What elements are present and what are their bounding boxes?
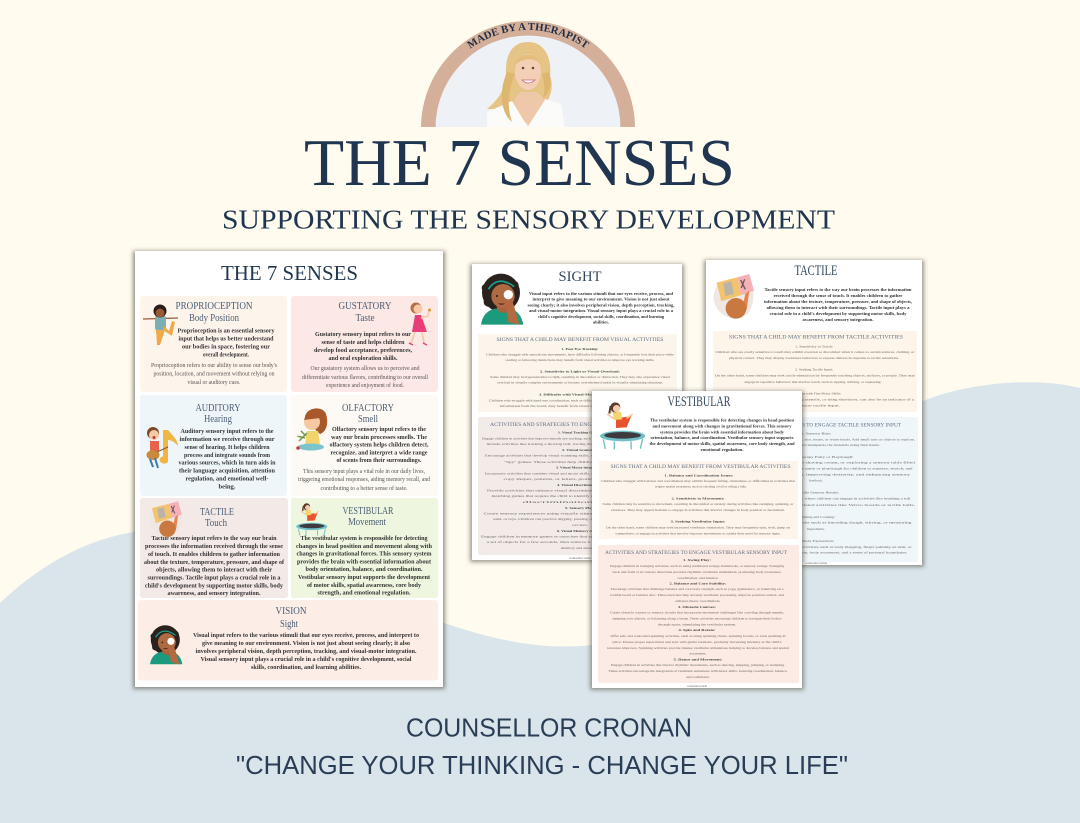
tactile intro: Tactile sensory input refers to the way our brain processes the information <box>764 287 912 292</box>
panel: tactile: of touch. It enables children to gather information <box>148 551 280 558</box>
panel: proprioception: visual or auditory cues. <box>188 380 241 386</box>
panel: proprioception <box>140 296 287 392</box>
panel: olfactory: This sensory input plays a vital role in our daily lives, <box>303 469 425 475</box>
panel: visual activities: "Spy" games. These activities help children improve their ability to scan. <box>504 460 656 464</box>
panel: vestibular activities: place. Ensure proper supervision and start with gentle rotations, gradually increasing intensity as the child's <box>612 640 782 645</box>
panel: gustatory: Our gustatory system allows us to perceive and <box>310 366 420 372</box>
panel: gustatory: and oral exploration skills. <box>328 355 398 362</box>
panel: gustatory: Gustatory sensory input refers to our <box>315 331 411 338</box>
panel: vestibular activities: Encourage activities that challenge balance and core body strength, such as yoga, gymnastics, or balancing on a <box>610 587 784 592</box>
icon: girl covering one eye <box>150 625 182 664</box>
subtitle: SUPPORTING THE SENSORY DEVELOPMENT <box>222 204 836 234</box>
sight intro: abilities. <box>593 320 609 324</box>
vestibular intro: emotional regulation. <box>700 447 744 452</box>
tactile intro: crucial role in a child's development by supporting motor skills, body <box>770 311 907 316</box>
panel: tactile signs: Difficulty with tasks such as buttoning, using utensils, or tying shoelaces, can also be an indicator of a <box>716 398 915 402</box>
vestibular intro: and movement along with changes in gravitational forces. This sensory <box>652 424 792 428</box>
panel: proprioception: Proprioception is an essential sensory <box>178 328 275 334</box>
panel: vestibular activities <box>598 545 799 683</box>
panel: tactile signs: child needing more tactile input. <box>770 404 840 408</box>
panel: visual activities: ACTIVITIES AND STRATEGIES TO ENGAGE VISUAL SENSORY INPUT <box>490 423 670 428</box>
panel: vision: Visual sensory input plays a crucial role in a child's cognitive development, social <box>200 656 412 663</box>
vestibular intro: system provides the brain with essential information about body <box>660 430 785 434</box>
panel: vestibular: provides the brain with essential information about <box>297 558 432 566</box>
panel: gustatory: differentiate various flavors, contributing to our overall <box>302 374 428 381</box>
panel: tactile: objects, allowing them to interact with their <box>156 566 272 574</box>
panel: vestibular activities: tolerance improves. Spinning activities provide intense vestibular stimulation, helping to develop balance and spatial <box>607 646 789 651</box>
panel: vestibular activities: 5. Dance and Movement: <box>674 658 722 662</box>
panel: olfactory: OLFACTORY <box>342 403 394 414</box>
panel: tactile activities: encouraging children to feel and manipulate the materials using their hands. <box>752 443 880 447</box>
arch caption: MADE BY A THERAPIST <box>466 22 590 49</box>
panel: vestibular activities: wobble board or balance disc. These exercises help develop vestibular processing, improve postural control, and <box>610 593 784 598</box>
panel: vestibular activities: Create obstacle courses or sensory circuits that incorporate movement challenges like crawling through tunnels, <box>610 610 784 616</box>
panel: visual signs: information from the board, may benefit from visual activities that improve these motor skills. <box>500 404 660 409</box>
panel: vestibular signs: trampolines, or engage in activities that involve vigorous movements to satisfy their need for sensory input. <box>616 532 781 536</box>
panel: visual activities: 4. Visual Discrimination: <box>557 483 603 487</box>
tactile intro: allowing them to interact with their surroundings. Tactile input plays a <box>766 305 910 310</box>
panel: visual activities: sand, or toys. Children can practice digging, pouring, and searching for objects while visual play <box>493 517 668 522</box>
panel: vision <box>138 600 438 680</box>
panel: vestibular: changes in head position and movement along with <box>296 543 432 550</box>
footer credit: counsellorcronan <box>805 561 827 565</box>
panel: tactile activities: with different textures. Offer tactile therapy putty or playdough for children to squeeze, stretch, and <box>720 466 913 472</box>
panel: tactile activities: Encourage tactile body exploration through activities such as body mapping, finger painting on skin, or <box>720 545 913 550</box>
panel: visual signs: SIGNS THAT A CHILD MAY BENEFIT FROM VISUAL ACTIVITIES <box>496 338 664 343</box>
panel: tactile activities: 3. Tactile Sensory Breaks: <box>793 490 839 494</box>
panel: visual activities: 5. Sensory Play: <box>565 506 595 510</box>
panel: vision: Visual input refers to the various stimuli that our eyes receive, process, and interpret to <box>193 632 419 639</box>
panel: visual activities: 3. Visual Motor Integration: <box>556 466 604 470</box>
panel: vestibular signs: 1. Balance and Coordination Issues: <box>664 474 734 478</box>
panel: visual activities: 1. Visual Tracking Games: <box>558 430 602 434</box>
panel: tactile signs: On the other hand, some children may seek tactile stimulation by frequently touching objects, surfaces, or people. They may <box>715 374 916 378</box>
panel: proprioception: input that helps us better understand <box>178 336 274 342</box>
panel: tactile: awareness, and sensory integration. <box>168 590 261 597</box>
panel: auditory: their language acquisition, attention <box>179 468 275 474</box>
panel: olfactory: Olfactory sensory input refers to the <box>332 426 426 433</box>
panel: tactile signs: SIGNS THAT A CHILD MAY BENEFIT FROM TACTILE ACTIVITIES <box>729 336 903 340</box>
panel: tactile activities: brush on their skin or using texture-related activities like Velcro boards or tactile balls. <box>717 503 915 507</box>
panel: vestibular signs: 2. Sensitivity to Movement: <box>672 496 724 500</box>
panel: visual signs: Children who struggle with smooth eye movements, have difficulty following objects, or frequently lose their place while <box>486 352 675 358</box>
poster: tactile <box>704 260 924 567</box>
panel: visual activities: a set of objects for a few seconds, then remove it and ask them to recall what was there. <box>486 540 674 545</box>
therapist portrait arch <box>421 21 635 127</box>
panel: proprioception: PROPRIOCEPTION <box>176 301 252 312</box>
panel: tactile: Tactile sensory input refers to the way our brain <box>152 535 277 542</box>
panel: tactile: Touch <box>205 518 227 529</box>
panel: vestibular signs: require spatial awareness, such as catching a ball or riding a bike. <box>655 484 747 490</box>
icon: child reading a book <box>149 501 182 537</box>
panel: vestibular signs: Some children may be sensitive to movement, resulting in discomfort or anxiety during activities like swinging, spinning, or <box>602 502 795 507</box>
icon: boy with guitar <box>146 427 178 468</box>
panel: vestibular activities: jumping over objects, or balancing along a beam. These activities encourage children to navigate their bodies <box>611 616 782 622</box>
panel: olfactory: olfactory system helps children detect, <box>330 442 429 448</box>
panel: auditory <box>140 395 287 496</box>
panel: visual activities: Encourage activities that develop visual scanning skills, such as word searches or hidden pictures and <box>485 454 676 458</box>
panel: vestibular: changes in gravitational forces. This sensory system <box>296 550 432 558</box>
vestibular intro: The vestibular system is responsible for detecting changes in head position <box>650 418 794 422</box>
panel: vestibular activities: Engage children in swinging activities, such as using traditional swings, hammocks, or sensory swings. Swinging <box>610 564 784 569</box>
panel: tactile signs: physical contact. They may display avoidance behaviors or express distress in response to tactile sensations. <box>729 356 899 360</box>
panel: vestibular activities: coordination, and balance. <box>678 576 719 581</box>
icon: girl with flowers <box>296 408 327 450</box>
panel: auditory: Hearing <box>204 414 232 425</box>
panel: tactile: about the texture, temperature, pressure, and shape of <box>144 559 285 566</box>
tactile intro: information about the texture, temperature, pressure, and shape of objects, <box>764 299 912 304</box>
panel: vestibular signs: 3. Seeking Vestibular Input: <box>670 520 726 524</box>
panel: visual activities: discrimination abilities. <box>522 500 638 504</box>
panel: tactile: surroundings. Tactile input plays a crucial role in a <box>148 574 281 582</box>
panel: vestibular signs: On the other hand, some children may seek increased vestibular stimulation. They may frequently spin, twirl, jump on <box>606 526 790 530</box>
panel: olfactory: Smell <box>358 414 378 425</box>
panel: gustatory: GUSTATORY <box>338 301 392 312</box>
panel: proprioception: position, location, and movement without relying on <box>154 372 274 378</box>
panel: tactile activities: 2. Tactile Therapy Putty or Playdough: <box>778 455 854 459</box>
panel: tactile activities: ingredients. <box>807 527 825 531</box>
panel: olfactory: triggering emotional responses, aiding memory recall, and <box>298 477 430 483</box>
panel: vestibular: body orientation, balance, and coordination. <box>306 566 423 573</box>
panel: gustatory: Taste <box>356 313 375 324</box>
sight intro: and visual-motor integration. Visual sensory input plays a crucial role in a <box>529 308 674 313</box>
tactile intro: awareness, and sensory integration. <box>802 317 874 322</box>
panel: tactile signs: Children who are overly sensitive to touch may exhibit aversion or discomfort when it comes to certain textures, clothing, or <box>716 350 916 355</box>
panel: tactile: child's development by supporting motor skills, body <box>145 582 284 590</box>
panel: vision: Sight <box>280 619 298 630</box>
panel: tactile activities: Incorporate tactile breaks throughout the day, where children can engage in activities like brushing a soft <box>722 496 911 502</box>
panel: olfactory <box>291 395 438 496</box>
poster: vestibular <box>590 391 804 690</box>
panel: visual signs: 1. Poor Eye Tracking: <box>562 347 598 351</box>
tactile title: TACTILE <box>794 263 838 279</box>
panel: tactile activities: ACTIVITIES AND STRATEGIES TO ENGAGE TACTILE SENSORY INPUT <box>731 424 901 428</box>
panel: vision: skills, coordination, and learning abilities. <box>251 664 361 671</box>
panel: vestibular: strength, and emotional regulation. <box>318 590 411 596</box>
panel: vision: VISION <box>276 606 306 617</box>
vestibular intro: the development of motor skills, spatial awareness, core body strength, and <box>650 441 795 446</box>
panel: visual signs <box>478 334 677 412</box>
panel: visual signs: Children who struggle with hand-eye coordination, such as difficulty copying shapes or catching a ball, or copying <box>489 398 671 404</box>
panel: tactile signs: 3. Difficulty with Fine Motor Skills: <box>787 392 841 396</box>
panel: visual activities: 6. Visual Memory Games: <box>557 529 603 533</box>
panel: proprioception: Body Position <box>189 313 239 324</box>
panel: vestibular activities: back and forth or in various directions provides rhythmic vestibular stimulation, promoting body awareness, <box>612 570 782 575</box>
sight intro: seeing clearly; it also involves peripheral vision, depth perception, tracking, <box>528 302 674 308</box>
panel: tactile activities: 5. Body Exploration: <box>798 539 834 543</box>
sight intro: child's cognitive development, social skills, coordination, and learning <box>538 314 665 319</box>
brand name: COUNSELLOR CRONAN <box>406 712 692 742</box>
panel: gustatory: sense of taste and helps children <box>322 339 405 346</box>
panel: visual activities: 2. Visual Scanning: <box>562 448 598 452</box>
panel: vestibular activities: 1. Swing Play: <box>683 558 711 562</box>
panel: vestibular activities: These activities encourage the integration of vestibular sensations with motor skills, fostering coordination, balance, <box>608 669 788 674</box>
panel: vestibular activities: 2. Balance and Core Stability: <box>670 582 726 586</box>
panel: visual activities: occurs. <box>572 523 588 527</box>
panel: vestibular activities: through space, stimulating the vestibular system. <box>658 622 736 628</box>
panel: auditory: AUDITORY <box>196 403 240 414</box>
panel: vestibular <box>291 498 438 598</box>
panel: tactile <box>140 498 288 598</box>
panel: visual activities: Create sensory experiences using visually stimulating materials, such as colored rice, <box>484 512 677 516</box>
panel: vestibular: VESTIBULAR <box>342 506 394 517</box>
panel: visual activities: Engage children in memory games or exercises that promote visual memory. For example, show <box>481 534 680 540</box>
poster: sight <box>470 264 684 562</box>
vestibular title: VESTIBULAR <box>668 394 730 410</box>
panel: vestibular signs: SIGNS THAT A CHILD MAY BENEFIT FROM VESTIBULAR ACTIVITIES <box>610 465 791 470</box>
panel: vestibular activities: and confidence. <box>686 675 710 679</box>
panel: vision: involves peripheral vision, depth perception, tracking, and visual-motor integration. <box>196 648 417 655</box>
panel: tactile: processes the information received through the sense <box>145 543 283 550</box>
sight intro: interpret to give meaning to our environment. Vision is not just about <box>532 296 670 302</box>
panel: visual activities: matching games that require the child to identify similarities and differences to improve <box>492 494 669 498</box>
icon: girl with ice cream <box>409 302 431 345</box>
panel: auditory: information we receive through our <box>180 436 275 443</box>
panel: proprioception: overall development. <box>203 352 249 358</box>
poster: the 7 senses overview <box>133 251 445 689</box>
panel: gustatory <box>291 296 438 392</box>
icon: child reading a book <box>713 274 754 319</box>
panel: tactile signs: 2. Seeking Tactile Input: <box>795 368 833 372</box>
panel: tactile activities: feedback. <box>809 478 823 482</box>
panel: visual signs: overload in visually complex environments or become overwhelmed easily in visually stimulating situations. <box>497 380 663 384</box>
panel: vestibular activities: awareness. <box>690 652 707 656</box>
tagline: "CHANGE YOUR THINKING - CHANGE YOUR LIFE" <box>236 750 848 780</box>
panel: tactile activities: Create sensory bins filled with materials like sand, rice, beans, or water beads. Add small toys or objects to explore, <box>717 438 915 442</box>
blue wave background <box>0 382 1080 823</box>
panel: tactile activities: mold, strengthening hand muscles, improving dexterity, and enhancing sensory <box>722 472 911 478</box>
icon: girl covering one eye <box>481 274 523 325</box>
panel: vestibular activities: Offer safe and controlled spinning activities, such as using spinning chairs, spinning boards, or even spinning in <box>610 634 786 639</box>
panel: olfactory: recognize, and interpret a wide range <box>330 450 428 456</box>
panel: vestibular activities: ACTIVITIES AND STRATEGIES TO ENGAGE VESTIBULAR SENSORY INPUT <box>605 551 787 556</box>
sight title: SIGHT <box>558 269 602 285</box>
panel: olfactory: way our brain processes smells. The <box>331 434 427 441</box>
panel: vestibular: Movement <box>348 517 386 528</box>
panel: vestibular: The vestibular system is responsible for detecting <box>300 535 428 542</box>
footer credit: counsellorcronan <box>569 556 591 560</box>
panel: visual activities: include activities like tracking a moving ball, tracing mazes or paths with a finger, or playing catch. <box>486 442 674 447</box>
panel: vestibular: of motor skills, spatial awareness, core body <box>307 582 422 589</box>
panel: tactile: TACTILE <box>200 507 234 518</box>
panel: proprioception: our bodies in space, fostering our <box>182 344 270 350</box>
panel: tactile activities: Engage in finger painting, playing with shaving cream, or exploring a sensory table filled <box>717 460 916 466</box>
panel: vestibular activities: enhance motor coordination. <box>676 599 721 603</box>
panel: vestibular activities: 4. Spin and Rotate: <box>678 628 716 632</box>
panel: auditory: various sources, which in turn aids in <box>178 460 276 466</box>
footer credit: counsellorcronan <box>687 684 707 688</box>
panel: olfactory: contributing to a better sense of taste. <box>320 485 408 492</box>
panel: tactile activities: 4. Baking and Cooking: <box>797 515 835 519</box>
poster title: THE 7 SENSES <box>221 261 358 285</box>
icon: girl on trampoline <box>600 402 645 449</box>
sight intro <box>528 291 674 324</box>
panel: vestibular activities: Engage children in activities that involve rhythmic movements, such as dancing, skipping, jumping, or stomping. <box>611 663 785 668</box>
panel: tactile signs: 1. Sensitivity to Touch: <box>795 344 833 348</box>
main title: THE 7 SENSES <box>304 126 735 200</box>
panel: visual activities: Engage children in activities that improve smooth eye tracking, such as following a moving object with their eyes. This can <box>482 436 678 442</box>
panel: tactile activities: 1. Sensory Bins: <box>801 432 831 436</box>
panel: vestibular activities: 3. Obstacle Courses: <box>678 605 716 609</box>
tactile intro <box>764 287 912 322</box>
panel: vestibular: Vestibular sensory input supports the development <box>298 574 431 581</box>
panel: vestibular signs: elevators. They may appear hesitant to engage in activities that involve changes in body position or movement. <box>611 508 785 512</box>
panel: visual activities <box>478 417 680 555</box>
panel: gustatory: develop food acceptance, preferences, <box>314 347 412 354</box>
panel: tactile activities <box>713 417 918 562</box>
panel: vestibular signs: Children who struggle with balance and coordination may exhibit frequent falling, clumsiness, or difficulties in activities that <box>601 479 795 484</box>
panel: visual signs: 3. Difficulty with Visual-Motor Integration: <box>539 392 621 396</box>
panel: tactile signs: engage in repetitive behaviors that involve touch, such as tapping, rubbing, or squeezing. <box>744 380 882 385</box>
panel: gustatory: experience and enjoyment of food. <box>326 382 404 389</box>
icon: balancing girl <box>143 304 178 345</box>
panel: auditory: sense of hearing. It helps children <box>184 444 270 451</box>
vestibular intro <box>650 418 795 452</box>
panel: auditory: being. <box>218 484 236 490</box>
panel: visual signs: 2. Sensitivity to Light or Visual Overload: <box>540 370 620 374</box>
panel: tactile activities: temporary tattoos, promoting self-regulation, body awareness, and a sense of personal boundaries. <box>724 550 908 556</box>
panel: visual signs: reading or following instructions may benefit from visual activities to improve eye tracking skills. <box>506 358 655 362</box>
tactile intro: received through the sense of touch. It enables children to gather <box>774 293 902 298</box>
icon: girl on trampoline <box>296 503 327 536</box>
panel: visual activities: copy shapes, patterns, or letters, promoting hand-eye coordination. <box>504 477 657 482</box>
panel: auditory: Auditory sensory input refers to the <box>180 428 274 435</box>
panel: vision: give meaning to our environment. Vision is not just about seeing clearly; it also <box>202 640 410 647</box>
panel: visual signs: Some children may be hypersensitive to light, resulting in discomfort or distraction. They may also experience visual <box>490 375 670 380</box>
panel: visual activities: Incorporate activities that combine visual and motor skills, such as drawing, tracing, or asking the child to <box>485 472 676 476</box>
panel: visual activities: memory and attention. <box>561 546 599 550</box>
panel: auditory: regulation, and emotional well- <box>186 476 268 482</box>
vestibular intro: orientation, balance, and coordination. Vestibular sensory input supports <box>650 435 794 440</box>
panel: tactile activities: Involve children in messy hands-on tasks such as kneading dough, stirring, or measuring <box>720 520 912 526</box>
panel: visual activities: Provide activities that enhance visual discrimination skills, such as puzzles, sorting, or <box>487 488 675 494</box>
panel: olfactory: of scents from their surroundings. <box>336 457 422 464</box>
panel: vestibular signs <box>599 461 798 539</box>
panel: proprioception: Proprioception refers to our ability to sense our body's <box>151 362 278 369</box>
sight intro: Visual input refers to the various stimuli that our eyes receive, process, and <box>529 291 673 296</box>
panel: auditory: process and integrate sounds from <box>184 452 271 459</box>
panel: tactile signs <box>713 331 917 412</box>
